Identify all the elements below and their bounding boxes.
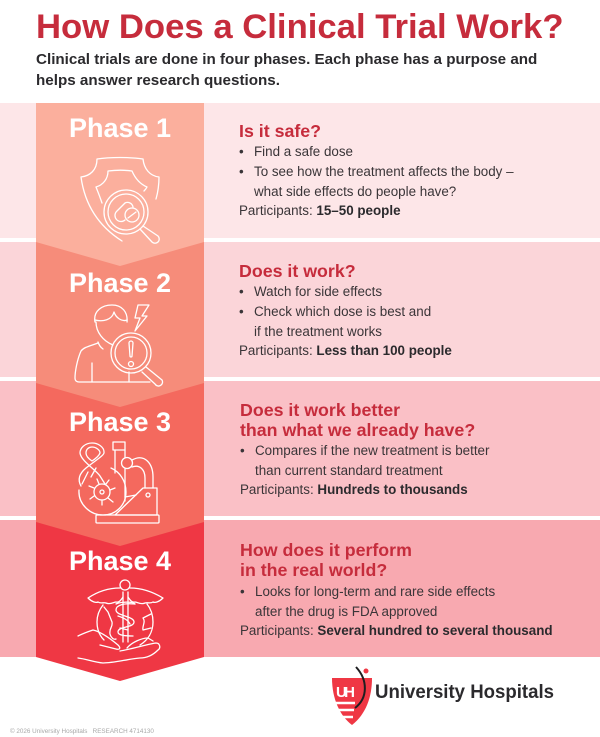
text block: phase 3: • <box>240 443 245 458</box>
icon: shield with pills under magnifier <box>81 158 159 243</box>
logo shield: UH <box>336 684 355 701</box>
bullet: check dose: Check which dose is best and <box>254 304 431 319</box>
participants: phase 4: Participants: Several hundred to several thousand <box>240 623 553 638</box>
bullet: check dose <box>239 304 431 339</box>
footer: copyright: © 2026 University Hospitals RESEARCH 4714130 <box>10 728 154 735</box>
chevron: phase 2 <box>36 242 204 407</box>
intro text: helps answer research questions. <box>36 72 280 88</box>
question: phase 2: Does it work? <box>239 261 356 281</box>
bullet: check dose: if the treatment works <box>254 324 382 339</box>
band: phase 4 background <box>0 520 600 657</box>
question: phase 3: than what we already have? <box>240 420 475 440</box>
title: How Does a Clinical Trial Work? <box>36 8 564 46</box>
question: phase 3 <box>240 400 475 440</box>
band: phase 2 background <box>0 242 600 377</box>
question: phase 1: Is it safe? <box>239 121 321 141</box>
bullet: compares treatment <box>240 443 490 478</box>
text block: phase 1 <box>239 121 514 218</box>
band: phase 3 background <box>0 381 600 516</box>
logo wordmark: University Hospitals <box>375 681 554 703</box>
bullet: treatment effects: To see how the treatment affects the body – <box>254 164 514 179</box>
icon: ribbon, virus and microscope <box>79 442 159 523</box>
question: phase 4: in the real world? <box>240 560 387 580</box>
bullet: long-term side effects: after the drug is FDA approved <box>255 604 437 619</box>
heading: phase 4: Phase 4 <box>69 546 171 576</box>
band: phase 1 background <box>0 103 600 238</box>
text block: phase 1: • <box>239 164 244 179</box>
question: phase 3: Does it work better <box>240 400 400 420</box>
heading: phase 2: Phase 2 <box>69 268 171 298</box>
bullet: compares treatment: than current standard treatment <box>255 463 443 478</box>
bullet: treatment effects <box>239 164 514 199</box>
intro text <box>36 51 537 88</box>
bullet: watch for side effects: Watch for side effects <box>254 284 382 299</box>
bullet: long-term side effects: Looks for long-term and rare side effects <box>255 584 495 599</box>
participants: phase 3: Participants: Hundreds to thousands <box>240 482 468 497</box>
heading: phase 1: Phase 1 <box>69 113 171 143</box>
text block: phase 2 <box>239 261 452 358</box>
question: phase 4: How does it perform <box>240 540 412 560</box>
icon: person with alert under magnifier <box>75 305 163 386</box>
icon: caduceus, globe and caring hand <box>78 580 163 663</box>
bullet: long-term side effects <box>240 584 495 619</box>
text block: phase 1: • <box>239 144 244 159</box>
text block: phase 3 <box>240 400 490 497</box>
bullet: find a safe dose: Find a safe dose <box>254 144 353 159</box>
bullet: treatment effects: what side effects do people have? <box>254 184 456 199</box>
text block: phase 4: • <box>240 584 245 599</box>
chevron: phase 1 <box>36 103 204 266</box>
chevron: phase 3 <box>36 383 204 546</box>
intro text: Clinical trials are done in four phases. Each phase has a purpose and <box>36 51 537 68</box>
bullet: compares treatment: Compares if the new treatment is better <box>255 443 489 458</box>
question: phase 4 <box>240 540 412 580</box>
heading: phase 3: Phase 3 <box>69 407 171 437</box>
text block: phase 2: • <box>239 284 244 299</box>
chevron: phase 4 <box>36 521 204 681</box>
participants: phase 1: Participants: 15–50 people <box>239 203 401 218</box>
logo shield <box>332 667 372 725</box>
logo: University Hospitals <box>332 666 554 725</box>
participants: phase 2: Participants: Less than 100 people <box>239 343 452 358</box>
text block: phase 2: • <box>239 304 244 319</box>
